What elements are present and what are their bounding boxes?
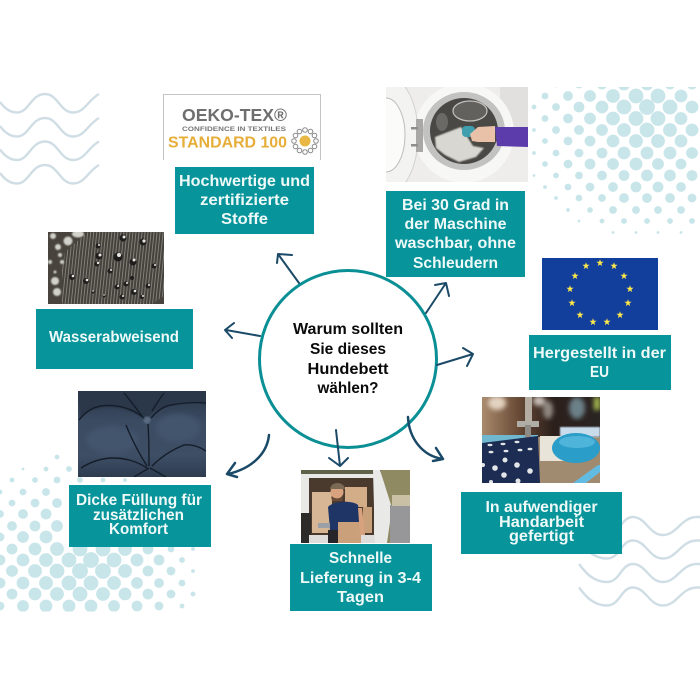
arrow: to made in EU: [437, 348, 473, 366]
box: elaborate handmade production: In aufwendiger: [486, 499, 598, 516]
arrow: to fast delivery: [329, 430, 348, 466]
box: thick filling for extra comfort: zusätzlichen: [93, 507, 184, 524]
box: machine washable at 30 degrees: [386, 191, 525, 277]
box: machine washable at 30 degrees: Schleudern: [413, 255, 498, 272]
image: OEKO-TEX Standard 100 logo: [164, 94, 320, 160]
box: fast delivery in 3-4 days: Tagen: [337, 589, 384, 606]
box: thick filling for extra comfort: Dicke Füllung für: [76, 492, 202, 509]
box: elaborate handmade production: gefertigt: [509, 528, 575, 545]
image: padded navy cushion: [78, 391, 206, 477]
image: delivery man with van: [301, 470, 410, 543]
box: made in the EU: [529, 335, 671, 390]
box: elaborate handmade production: [461, 492, 622, 554]
center circle with question: Sie dieses: [310, 341, 386, 358]
arrow: to certified fabrics: [277, 254, 299, 283]
center circle with question: Hundebett: [308, 361, 389, 378]
box: thick filling for extra comfort: [69, 485, 211, 547]
box: water repellent: [36, 309, 193, 369]
icon: flower seal: [292, 128, 318, 154]
box: high-quality certified fabrics: Hochwertige und: [179, 173, 310, 190]
box: high-quality certified fabrics: zertifizierte: [200, 192, 289, 209]
image: sewing machine and measuring tape: [481, 396, 600, 484]
arrow: to machine washable: [426, 283, 449, 313]
box: water repellent: Wasserabweisend: [49, 329, 179, 346]
box: high-quality certified fabrics: Stoffe: [221, 211, 268, 228]
image: OEKO-TEX Standard 100 logo: OEKO-TEX®: [182, 105, 287, 125]
image: washing machine: [386, 87, 528, 182]
box: elaborate handmade production: Handarbeit: [499, 514, 585, 531]
box: fast delivery in 3-4 days: Lieferung in 3-4: [300, 570, 421, 587]
box: high-quality certified fabrics: [175, 167, 314, 234]
box: thick filling for extra comfort: Komfort: [109, 521, 169, 538]
box: machine washable at 30 degrees: Bei 30 Grad in: [402, 197, 509, 214]
center circle with question: Warum sollten: [293, 321, 403, 338]
image: OEKO-TEX Standard 100 logo: STANDARD 100: [168, 134, 287, 152]
center circle with question: [260, 270, 436, 448]
box: machine washable at 30 degrees: waschbar, ohne: [394, 235, 516, 252]
arrow: to handmade: [408, 417, 443, 461]
box: fast delivery in 3-4 days: Schnelle: [329, 550, 392, 567]
arrow: to water repellent: [225, 323, 260, 338]
box: made in the EU: EU: [590, 364, 609, 381]
box: made in the EU: Hergestellt in der: [533, 345, 666, 362]
image: water drops on fabric: [48, 230, 164, 304]
image: EU flag: [542, 258, 658, 330]
box: fast delivery in 3-4 days: [290, 544, 432, 611]
center circle with question: wählen?: [317, 380, 378, 397]
box: machine washable at 30 degrees: der Maschine: [404, 216, 507, 233]
image: OEKO-TEX Standard 100 logo: CONFIDENCE IN TEXTILES: [182, 126, 287, 133]
arrow: to thick filling: [227, 435, 269, 477]
